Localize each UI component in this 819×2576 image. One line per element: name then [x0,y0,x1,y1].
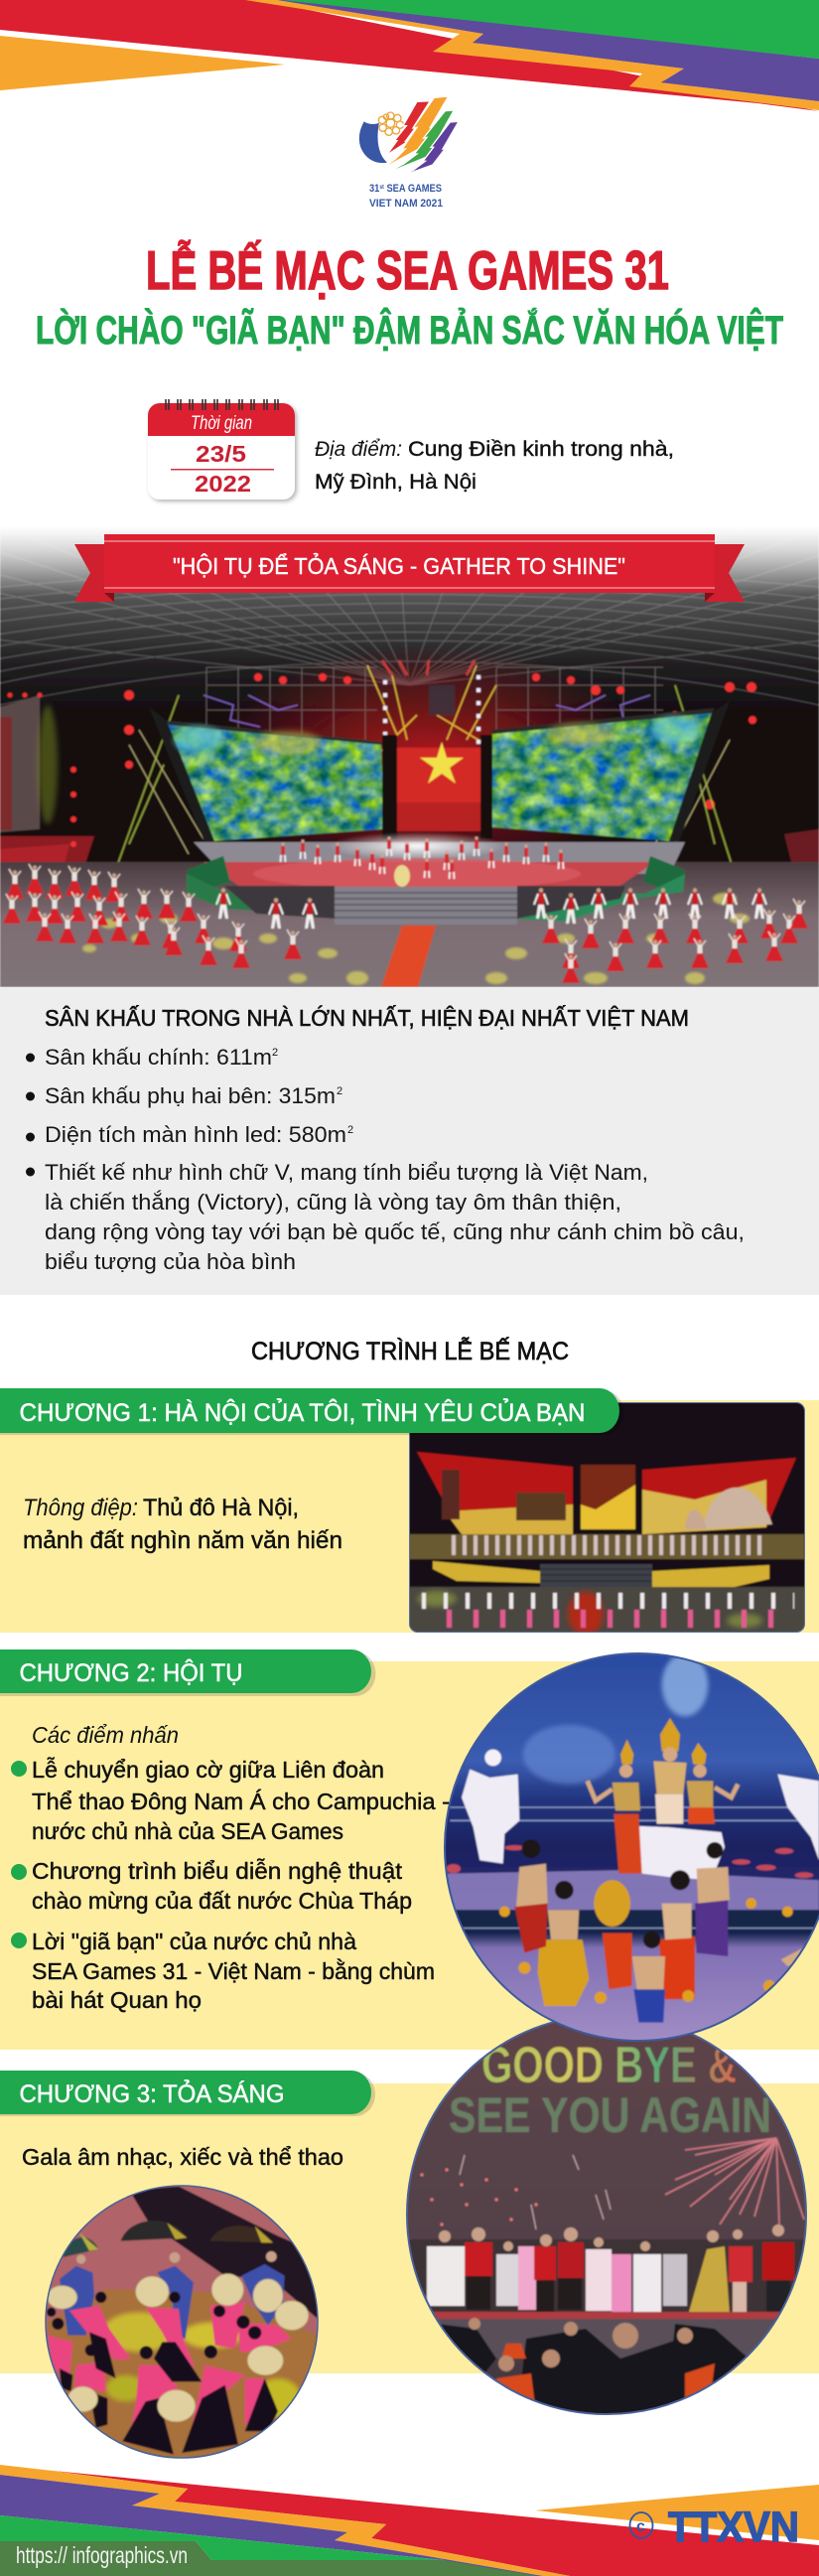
facts heading: SÂN KHẤU TRONG NHÀ LỚN NHẤT, HIỆN ĐẠI NHẤT VIỆT NAM [45,1004,689,1031]
chapter 2 dancers photo [445,1653,819,2041]
bottom decorative band [0,2465,819,2576]
highlight lines: chào mừng của đất nước Chùa Tháp [32,1888,412,1914]
fact lines: 2 [272,1047,278,1059]
fact lines: là chiến thắng (Victory), cũng là vòng tay ôm thân thiện, [45,1190,621,1215]
TTXVN logo: TTXVN [668,2504,799,2551]
calendar label: Thời gian [191,413,252,434]
red stage lights [8,673,756,847]
dancers left group [3,864,317,968]
fact lines: Sân khấu phụ hai bên: 315m [45,1083,336,1108]
logo: 31st SEA Games [359,96,459,210]
pink dancers [48,2302,291,2445]
fact lines: 2 [347,1124,353,1136]
stage performers [280,836,564,887]
side banners and seats [0,695,819,863]
highlight lines [32,1757,450,2013]
roof lattice [0,564,819,707]
closing screen text: GOOD BYE & [481,2037,737,2094]
LED screen right [490,701,730,842]
calendar year: 2022 [195,471,251,497]
venue text: Mỹ Đình, Hà Nội [315,471,477,494]
logo text: st [379,185,384,191]
logo text: SEA GAMES [384,183,442,195]
floor spots [446,1845,813,1878]
chapter 1 tab: CHƯƠNG 1: HÀ NỘI CỦA TÔI, TÌNH YÊU CỦA BẠN [20,1397,586,1427]
chapter 2 tab: CHƯƠNG 2: HỘI TỤ [20,1658,242,1687]
white costumed dancers [462,1770,819,1880]
chapter 1 message: Thủ đô Hà Nội, [143,1495,299,1521]
chapter 3 tab [0,2071,375,2116]
chapter 1 photo [407,1402,805,1636]
blue robed men [60,2264,285,2339]
highlight lines: Chương trình biểu diễn nghệ thuật [32,1858,403,1884]
chapter 1 message: Thông điệp: [23,1495,138,1521]
front group dancers [514,1839,819,2023]
chapter 1 cast row [452,1535,764,1555]
top decorative band [0,0,819,111]
water light [662,1653,708,1716]
chapter 2 tab [0,1649,375,1696]
logo text: 31 [369,183,381,195]
panel: chapter 1 [0,1400,819,1636]
stage glow [199,645,655,884]
conical hats [48,2274,309,2422]
chapter 1 message: mảnh đất nghìn năm văn hiến [23,1527,342,1554]
white light columns [381,673,482,745]
highlight lines: Lễ chuyển giao cờ giữa Liên đoàn [32,1757,384,1783]
fact bullets [26,1053,35,1176]
red banner [74,534,745,602]
panel: stage facts [0,987,819,1295]
highlight lines: Thể thao Đông Nam Á cho Campuchia - [32,1789,450,1814]
dancers right group [534,888,808,983]
stage stairs [335,887,517,925]
logo text: VIET NAM 2021 [369,198,443,210]
venue text: Địa điểm: [315,438,402,461]
panel: chapter 3 background [0,2083,819,2373]
logo text [369,183,443,210]
garlands [499,1898,793,2004]
umbrellas [62,2220,273,2257]
highlight lines: nước chủ nhà của SEA Games [32,1818,343,1844]
floor [0,862,819,987]
website url: https:// infographics.vn [16,2542,188,2568]
calendar [148,399,295,500]
chapter 3 tab: CHƯƠNG 3: TỎA SÁNG [20,2078,284,2108]
LED screen left [149,707,384,842]
standing gold dancers [588,1718,738,1874]
fact lines: Sân khấu chính: 611m [45,1045,272,1070]
chapter 1 stage platforms [433,1561,540,1583]
front dancers [441,2324,747,2413]
venue text [315,438,674,494]
fact lines: dang rộng vòng tay với bạn bè quốc tế, cũng như cánh chim bồ câu, [45,1219,745,1244]
calendar day: 23/5 [196,441,246,467]
chapter 1 floor dancers [422,1593,794,1609]
dark stage block [129,2187,318,2319]
black skirts [60,2332,278,2455]
logo swoosh [359,121,387,163]
chapter 3 text: Gala âm nhạc, xiếc và thể thao [22,2144,343,2170]
stage photo [0,526,819,987]
highlight bullets [11,1761,27,1948]
red carpet [381,926,436,987]
chapter 3 quan ho photo [46,2186,318,2458]
highlights label: Các điểm nhấn [32,1722,179,1748]
stage crowd [407,2224,814,2319]
sparks [420,2168,538,2231]
lit floor [47,2289,318,2458]
scaffold grid [206,667,663,740]
logo stripes [378,96,459,178]
chapter 1 tab [0,1388,623,1435]
fact lines: Diện tích màn hình led: 580m [45,1122,346,1147]
venue text: Cung Điền kinh trong nhà, [408,438,674,461]
fact lines: 2 [337,1085,342,1097]
fact lines: Thiết kế như hình chữ V, mang tính biểu tượng là Việt Nam, [45,1160,648,1185]
main stage [187,832,685,922]
highlight lines: Lời "giã bạn" của nước chủ nhà [32,1929,356,1954]
logo on backdrop [429,685,455,715]
fireworks [665,2138,804,2224]
chapter 3 closing photo [402,2011,819,2423]
TTXVN logo: c [636,2518,645,2535]
logo flower [378,112,404,135]
programme heading: CHƯƠNG TRÌNH LỄ BẾ MẠC [251,1336,569,1365]
fact lines [45,1045,745,1274]
dark hair [47,2292,261,2360]
highlight lines: SEA Games 31 - Việt Nam - bằng chùm [32,1958,435,1984]
panel: chapter 2 background [0,1661,819,2050]
centre flag panel [382,735,492,839]
fact lines: biểu tượng của hòa bình [45,1249,296,1274]
laser beams [114,660,735,874]
chapter 2 highlights [11,1722,450,2013]
highlight lines: bài hát Quan họ [32,1987,202,2013]
floor light spots [82,893,750,985]
banner text: "HỘI TỤ ĐỂ TỎA SÁNG - GATHER TO SHINE" [173,551,625,579]
chapter 1 message [23,1495,342,1554]
